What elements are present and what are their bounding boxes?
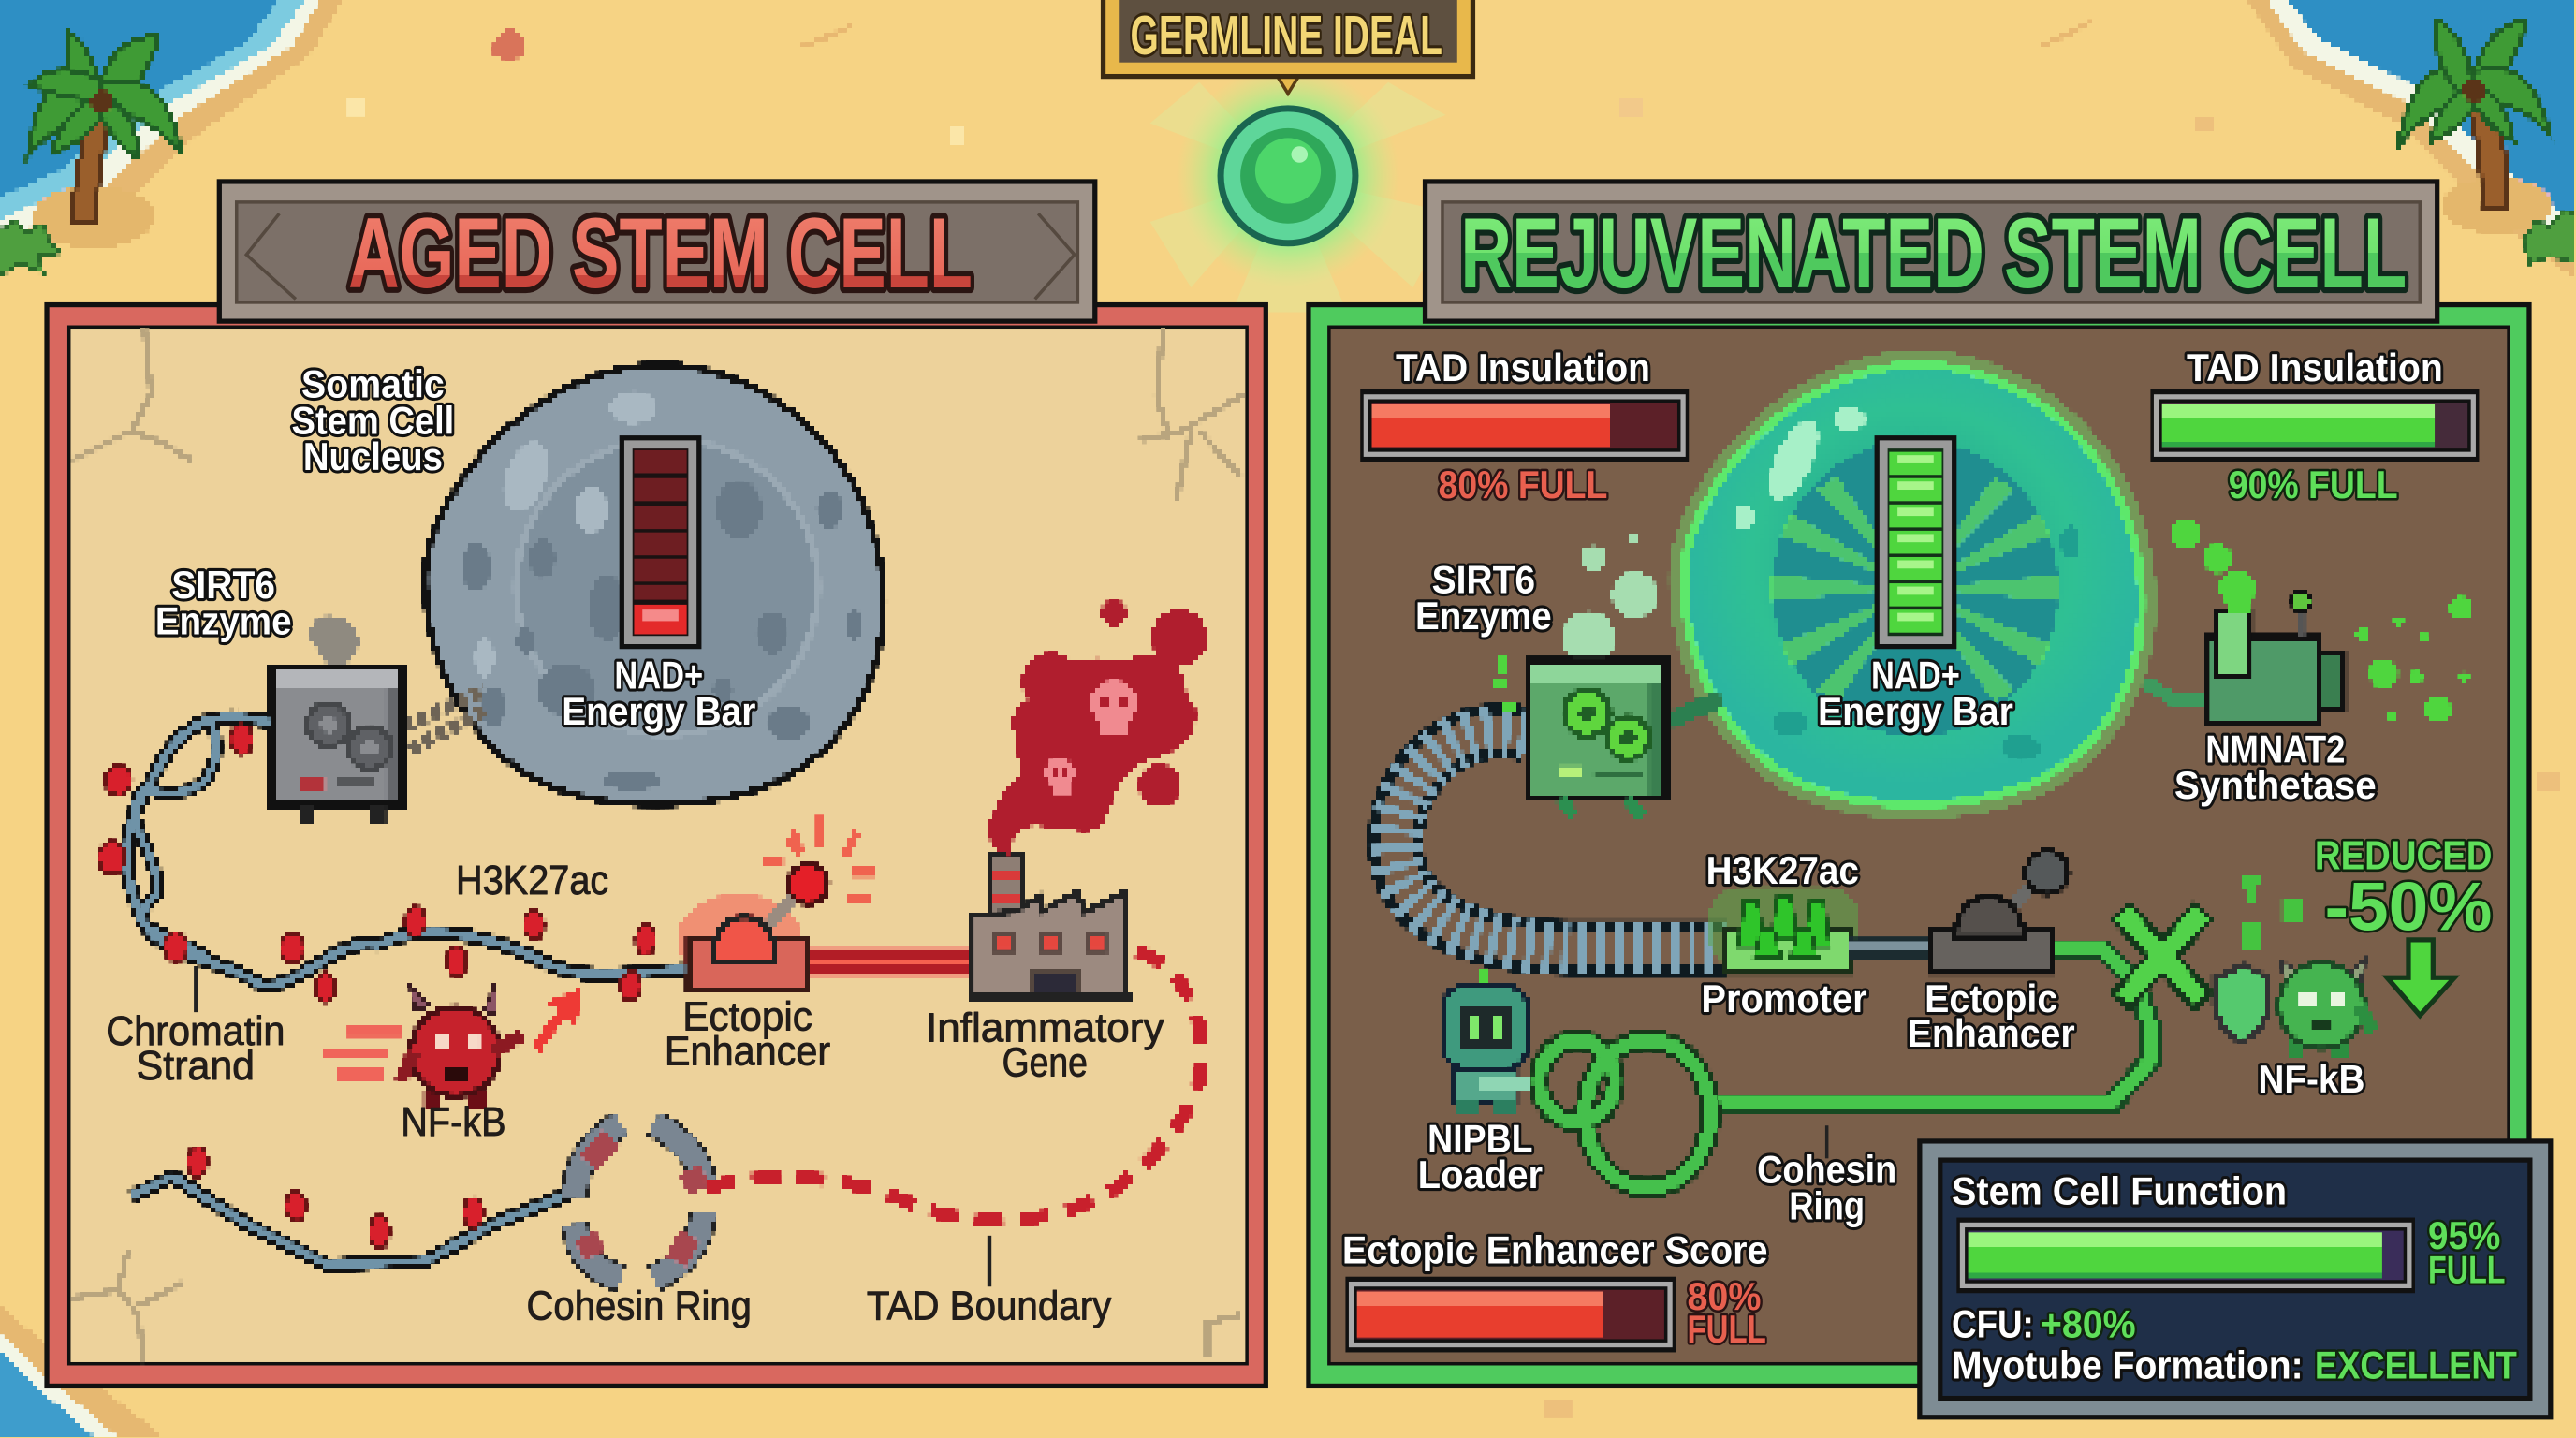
label: Ectopic Enhancer: Ectopic (1925, 976, 2057, 1020)
stat: myotube formation: Myotube Formation: (1952, 1343, 2304, 1387)
icon: closed cohesin ring (1540, 1040, 1710, 1188)
label: NF-kB: NF-kB (2258, 1057, 2364, 1101)
stat: CFU (1952, 1302, 2136, 1346)
heading: rejuvenated stem cell banner (1423, 179, 2439, 324)
aged panel illustrations (72, 329, 1244, 1364)
label: Somatic Stem Cell Nucleus (292, 362, 454, 478)
stat: myotube formation: EXCELLENT (2315, 1343, 2517, 1387)
bar: right TAD insulation: TAD Insulation (2187, 345, 2443, 389)
chromatin strand with H3K27ac marks (126, 716, 690, 986)
icon: promoter crystals (1708, 888, 1860, 973)
label: Chromatin Strand: Chromatin (106, 1008, 285, 1054)
promoter to enhancer link (1850, 938, 1932, 958)
heading: aged stem cell banner (217, 179, 1097, 324)
label: NAD+ Energy Bar: Energy Bar (562, 689, 755, 733)
label: SIRT6 Enzyme (1415, 558, 1552, 638)
stat: myotube formation (1952, 1343, 2517, 1387)
label: Somatic Stem Cell Nucleus: Nucleus (303, 434, 443, 478)
heading: germline ideal sign (1101, 0, 1475, 94)
panel: aged stem cell (44, 302, 1268, 1388)
label: Chromatin Strand (106, 1008, 285, 1089)
label: Ectopic Enhancer: Enhancer (665, 1028, 830, 1074)
callout: reduced -50%: REDUCED (2315, 832, 2492, 878)
panel: rejuvenated stem cell (1306, 302, 2532, 1388)
bar: ectopic enhancer score: 80% (1687, 1274, 1761, 1318)
label: NAD+ Energy Bar (562, 653, 755, 733)
label: NIPBL Loader: Loader (1418, 1152, 1543, 1196)
label: NMNAT2 Synthetase: Synthetase (2174, 763, 2377, 807)
icon: rusty SIRT6 enzyme machine (271, 616, 487, 825)
icon: active ectopic enhancer lever (677, 816, 976, 990)
label: NAD+ Energy Bar: NAD+ (614, 653, 703, 697)
icon: broken cohesin ring (575, 1123, 703, 1278)
label: SIRT6 Enzyme: SIRT6 (171, 563, 275, 607)
bar: stem cell function 95%: FULL (2428, 1248, 2506, 1292)
icon: germline orb (1150, 64, 1454, 312)
label: TAD Boundary: TAD Boundary (867, 1283, 1111, 1328)
rejuvenated panel illustrations (1396, 365, 2472, 1188)
aged panel energy bar and labels (106, 362, 1164, 1328)
bar: ectopic enhancer score: Ectopic Enhancer Score (1342, 1228, 1767, 1272)
label: H3K27ac: H3K27ac (456, 858, 608, 903)
panel: stem cell function: Stem Cell Function (1952, 1168, 2287, 1212)
label: NAD+ Energy Bar: Energy Bar (1818, 689, 2013, 733)
label: Ectopic Enhancer: Enhancer (1908, 1011, 2075, 1055)
bar: right TAD insulation (2150, 345, 2479, 506)
label: Inflammatory Gene: Gene (1003, 1040, 1088, 1086)
label: NAD+ Energy Bar (1818, 653, 2013, 733)
bar: ectopic enhancer score: FULL (1687, 1307, 1766, 1351)
panel: stem cell function (1917, 1138, 2553, 1419)
label: Inflammatory Gene (926, 1005, 1164, 1086)
coiled chromatin (1396, 731, 1725, 948)
label: Chromatin Strand: Strand (137, 1043, 255, 1089)
icon: left palm tree (28, 33, 181, 248)
rejuvenated panel bars and labels (1342, 345, 2492, 1352)
nucleus: rejuvenated glowing cell (1684, 365, 2142, 804)
icon: depleted NAD+ energy bar (620, 435, 701, 649)
icon: disabled ectopic enhancer lever (1930, 851, 2069, 973)
bar: left TAD insulation: TAD Insulation (1396, 345, 1650, 389)
callout: reduced -50%: -50% (2324, 867, 2492, 945)
label: SIRT6 Enzyme: Enzyme (155, 598, 292, 642)
label: Somatic Stem Cell Nucleus: Somatic (301, 362, 445, 406)
icon: green X block (2130, 920, 2195, 992)
icon: full NAD+ energy bar (1875, 435, 1956, 649)
bar: left TAD insulation (1360, 345, 1689, 506)
icon: green SIRT6 enzyme machine (1492, 534, 1721, 816)
icon: red NF-kB devil (322, 983, 581, 1110)
insulated TAD green loop (1717, 949, 2150, 1104)
label: Ectopic Enhancer: Ectopic (682, 993, 812, 1039)
stat: CFU: +80% (2041, 1302, 2136, 1346)
icon: NIPBL loader robot (1442, 970, 1534, 1116)
label: NMNAT2 Synthetase: NMNAT2 (2205, 726, 2345, 770)
stat: CFU: CFU: (1952, 1302, 2034, 1346)
cracks on parchment (72, 329, 1244, 1364)
bar: stem cell function 95%: 95% (2428, 1213, 2500, 1257)
icon: NMNAT2 synthetase machine (2144, 520, 2472, 723)
label: Promoter: Promoter (1701, 976, 1867, 1020)
red acetylation beads (98, 725, 655, 1003)
heading: germline ideal sign: GERMLINE IDEAL (1131, 4, 1442, 66)
label: Inflammatory Gene: Inflammatory (926, 1005, 1164, 1051)
label: SIRT6 Enzyme: Enzyme (1415, 594, 1552, 638)
icon: toxic red smoke with skulls (987, 600, 1208, 855)
TAD boundary dashed line (707, 949, 1203, 1221)
label: Cohesin Ring: Cohesin Ring (527, 1283, 752, 1328)
bar: left TAD insulation: 80% FULL (1439, 462, 1607, 506)
icon: shielded NF-kB monster (2215, 874, 2372, 1058)
nucleus: aged somatic stem cell (425, 365, 884, 804)
lower strand beads (187, 1147, 483, 1249)
label: NIPBL Loader: NIPBL (1427, 1116, 1533, 1160)
heading: aged stem cell banner: AGED STEM CELL (348, 197, 973, 309)
label: H3K27ac: H3K27ac (1706, 848, 1859, 892)
bar: stem cell function 95% (1956, 1213, 2506, 1293)
icon: right palm tree (2398, 20, 2553, 233)
icon: inflammatory gene factory (968, 855, 1132, 1003)
label: Ectopic Enhancer (665, 993, 830, 1074)
label: NAD+ Energy Bar: NAD+ (1871, 653, 1960, 697)
bar: ectopic enhancer score (1342, 1228, 1767, 1352)
label: NIPBL Loader (1418, 1116, 1543, 1196)
lower chromatin strand (131, 1177, 575, 1265)
label: Cohesin Ring: Ring (1789, 1183, 1865, 1227)
bar: right TAD insulation: 90% FULL (2229, 462, 2398, 506)
callout: reduced -50% (2315, 832, 2492, 1016)
label: Cohesin Ring: Cohesin (1757, 1148, 1896, 1192)
label: NF-kB: NF-kB (401, 1099, 506, 1145)
label: Cohesin Ring (1757, 1148, 1896, 1227)
aged panel frame (44, 302, 1268, 1388)
label: Somatic Stem Cell Nucleus: Stem Cell (292, 398, 454, 442)
label: SIRT6 Enzyme: SIRT6 (1432, 558, 1535, 602)
label: SIRT6 Enzyme (155, 563, 292, 642)
rejuvenated panel frame (1306, 302, 2532, 1388)
label: NMNAT2 Synthetase (2174, 726, 2377, 807)
label: Ectopic Enhancer (1908, 976, 2075, 1055)
